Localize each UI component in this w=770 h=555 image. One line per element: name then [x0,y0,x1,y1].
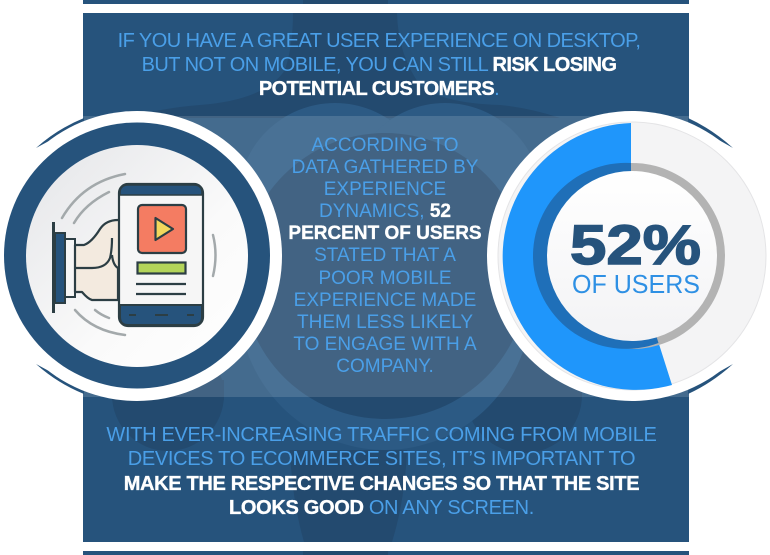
cuff [52,222,55,313]
center statistic text block: COMPANY. [336,356,434,377]
bottom text block: DEVICES TO ECOMMERCE SITES, IT’S IMPORTANT TO [128,448,635,470]
label: OF USERS [572,269,700,299]
top text block: IF YOU HAVE A GREAT USER EXPERIENCE ON DESKTOP, [118,30,640,52]
center statistic text block: PERCENT OF USERS [288,223,482,244]
bottom text block [106,424,657,519]
outer crescent arcs [36,118,84,394]
value: 52% [570,213,701,276]
center statistic text block: EXPERIENCE MADE [294,290,476,311]
hand [75,220,128,300]
background panels and shapes [83,0,689,555]
bottom text block: WITH EVER-INCREASING TRAFFIC COMING FROM MOBILE [106,424,657,446]
donut chart: 52% of users [487,111,766,401]
center statistic text block: EXPERIENCE [324,179,446,200]
center statistic text block: DATA GATHERED BY [292,157,478,178]
icon: hand holding phone badge [4,111,282,401]
center statistic text block: ACCORDING TO [311,135,459,156]
phone [119,184,203,326]
center statistic text block: POOR MOBILE [318,268,452,289]
outer crescent arcs [688,118,733,394]
center statistic text block: STATED THAT A [314,245,456,266]
top text block [118,30,640,100]
top text block: POTENTIAL CUSTOMERS. [259,78,499,100]
center statistic text block: TO ENGAGE WITH A [293,334,477,355]
bottom text block: LOOKS GOOD ON ANY SCREEN. [229,497,534,519]
center statistic text block: DYNAMICS, 52 [319,201,451,222]
motion lines [62,174,216,335]
blue segment 52 percent [503,123,672,390]
center statistic text block [288,135,482,377]
center statistic text block: THEM LESS LIKELY [297,312,473,333]
top text block: BUT NOT ON MOBILE, YOU CAN STILL RISK LOSING [142,54,616,76]
bottom text block: MAKE THE RESPECTIVE CHANGES SO THAT THE SITE [124,473,639,495]
